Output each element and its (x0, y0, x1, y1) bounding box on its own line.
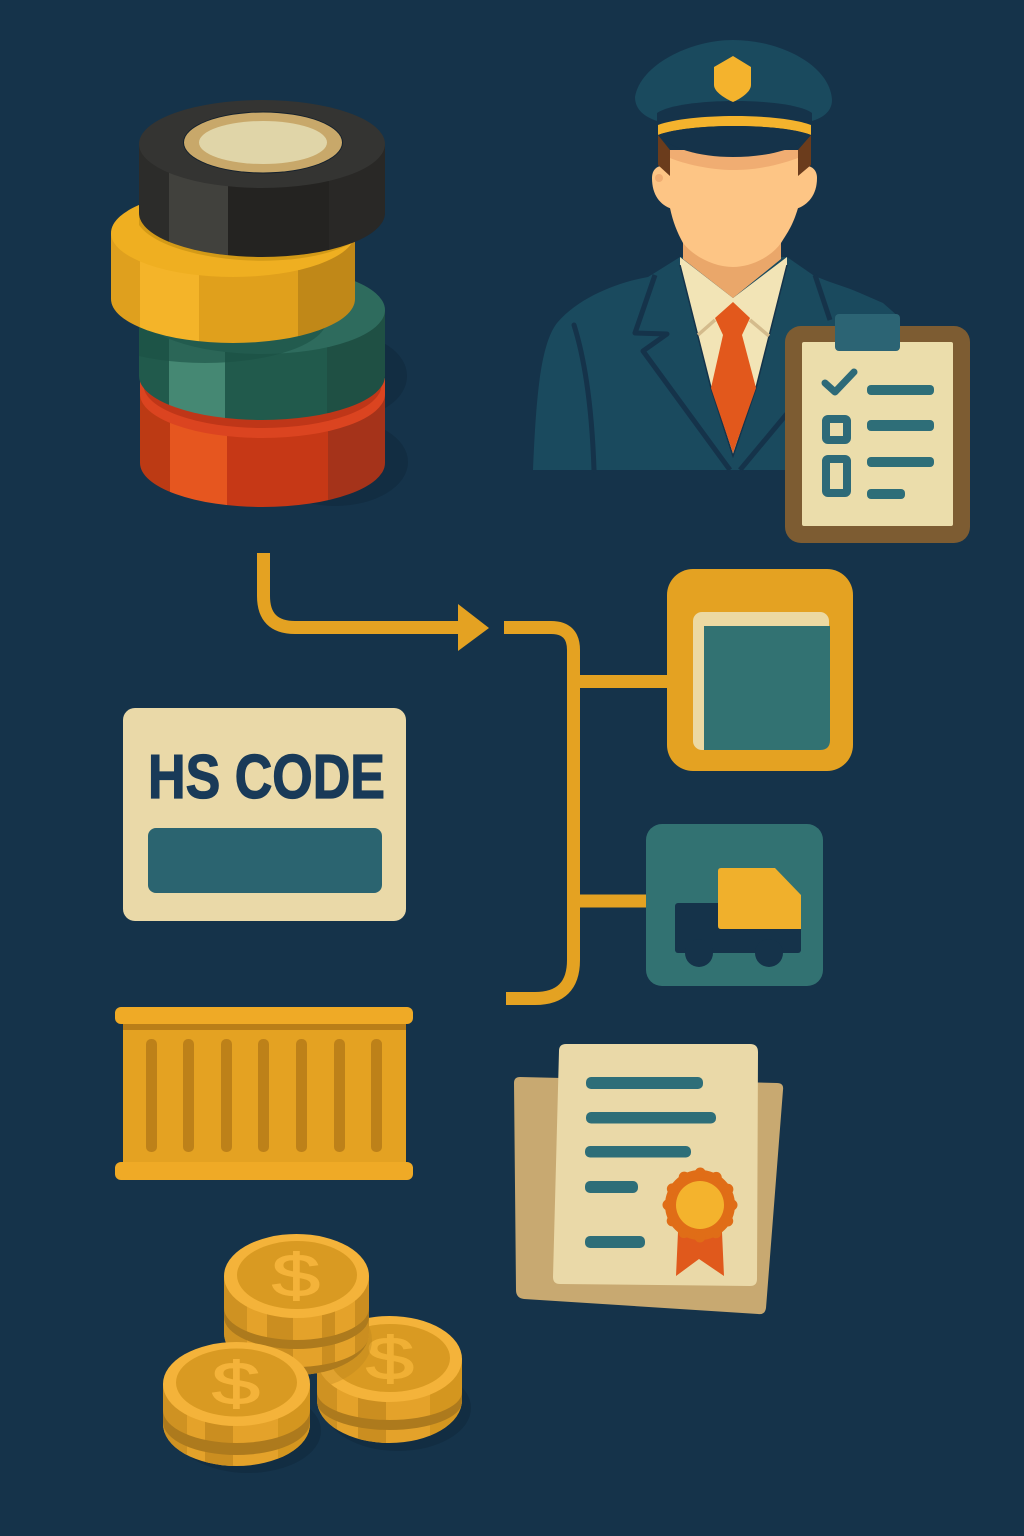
green tape roll (139, 281, 385, 420)
clipboard (785, 314, 970, 543)
neck (683, 235, 781, 298)
checklist lines (867, 385, 934, 499)
code field (148, 828, 382, 893)
icon: customs officer with clipboard (533, 40, 970, 543)
yellow tape roll (111, 205, 355, 343)
shirt and collar (680, 257, 787, 456)
cap badge (714, 56, 751, 102)
document lines (585, 1077, 716, 1248)
bracket connector (504, 628, 670, 998)
icon: shipping container (115, 1007, 413, 1180)
icon: gold box with teal panel (667, 569, 853, 771)
officer jacket (533, 257, 900, 470)
checklist boxes (826, 419, 847, 493)
heading: HS CODE: HS CODE (148, 743, 385, 812)
icon: stack of tape rolls (111, 100, 406, 507)
coin shadows (175, 1365, 471, 1473)
container ribs (146, 1039, 382, 1152)
icon: certificate (514, 1044, 783, 1314)
right coin (317, 1316, 462, 1443)
left coin (163, 1342, 310, 1474)
checklist check mark (825, 372, 854, 392)
top coin (224, 1234, 369, 1381)
front sheet (553, 1044, 758, 1286)
back sheet (514, 1077, 783, 1314)
right coin: $ (366, 1324, 414, 1392)
face (670, 150, 798, 267)
ears (652, 166, 817, 209)
icon: coin stacks (163, 1234, 471, 1474)
hair (658, 135, 811, 176)
officer cap (635, 40, 832, 157)
tape shadows (262, 334, 408, 506)
arrow: tape to bracket (264, 553, 489, 651)
HS code card (123, 708, 406, 921)
black tape roll (139, 100, 385, 264)
top coin: $ (272, 1241, 320, 1309)
ribbon seal (665, 1170, 735, 1276)
left coin: $ (212, 1349, 260, 1417)
truck body (675, 903, 801, 967)
truck cab (718, 868, 801, 929)
forehead shadow (670, 150, 798, 170)
icon: truck tile (646, 824, 823, 986)
necktie (711, 302, 756, 453)
red tape roll (140, 378, 385, 507)
